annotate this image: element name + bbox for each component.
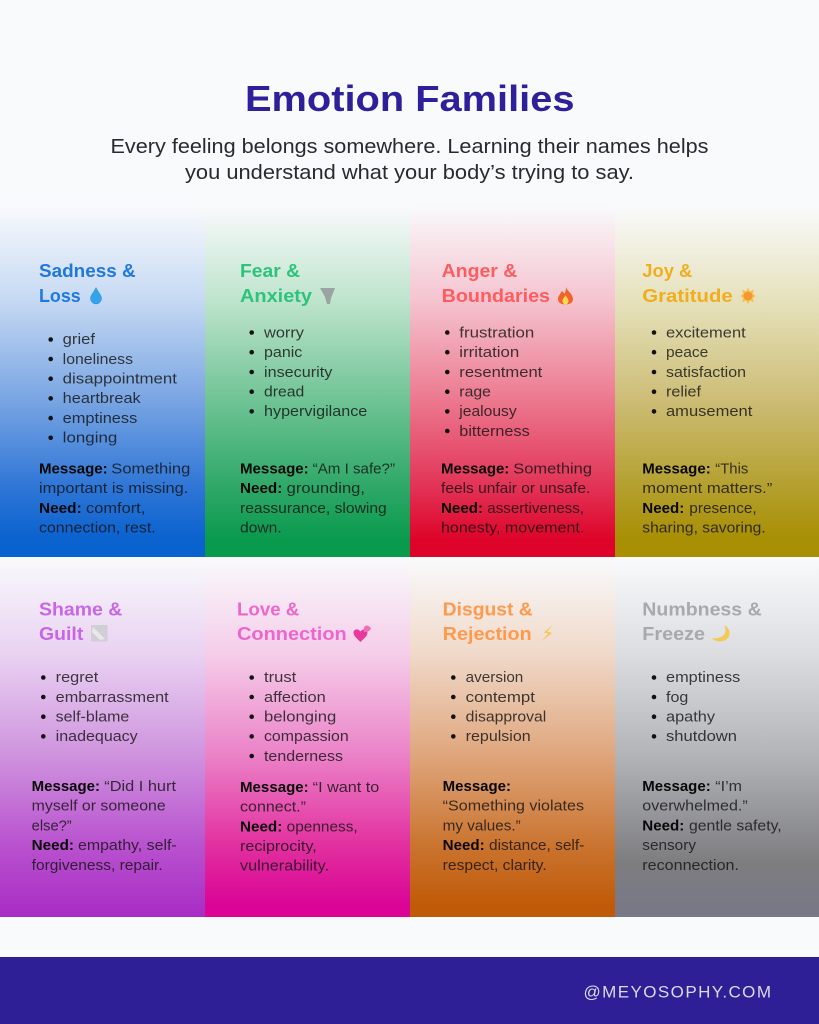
feelings list: heartbreak	[63, 391, 142, 407]
message and need: “This	[715, 462, 748, 478]
footer bar	[0, 957, 819, 1024]
feelings list: longing	[63, 430, 117, 446]
feelings list: insecurity	[264, 365, 333, 381]
icon: flame	[558, 287, 573, 304]
message and need: Message:	[32, 779, 100, 795]
message and need: “I’m	[715, 779, 742, 795]
message and need	[441, 462, 592, 536]
heading: joy and gratitude: Joy &	[642, 260, 692, 281]
message and need	[642, 779, 782, 874]
feelings list: disapproval	[466, 710, 546, 726]
subtitle: you understand what your body’s trying to say.	[185, 162, 634, 184]
panel background: grey gradient	[615, 557, 819, 917]
message and need: respect, clarity.	[443, 858, 547, 874]
panel background: magenta gradient	[205, 557, 410, 917]
heading: love and connection	[237, 598, 347, 644]
panel background: blue gradient	[0, 205, 205, 557]
feelings list: inadequacy	[56, 729, 139, 745]
feelings list: fog	[666, 690, 688, 706]
feelings list: rage	[459, 384, 491, 400]
feelings list	[652, 326, 752, 420]
message and need: Need:	[32, 838, 74, 854]
message and need: Message:	[443, 779, 511, 795]
feelings list: disappointment	[63, 372, 177, 388]
feelings list: bitterness	[459, 424, 530, 440]
message and need: important is missing.	[39, 481, 188, 497]
panel: sadness and loss	[0, 205, 205, 557]
message and need: reciprocity,	[240, 839, 317, 855]
feelings list: emptiness	[666, 670, 740, 686]
message and need: reconnection.	[642, 858, 739, 874]
feelings list: loneliness	[63, 352, 133, 368]
feelings list	[445, 326, 542, 440]
icon: tornado	[320, 288, 335, 304]
heading: numbness and freeze: Numbness &	[642, 598, 762, 620]
message and need	[642, 462, 772, 536]
panel background: green gradient	[205, 205, 410, 557]
subtitle: Every feeling belongs somewhere. Learning their names helps	[110, 136, 708, 158]
feelings list: excitement	[666, 326, 746, 342]
feelings list: irritation	[459, 345, 519, 361]
icon: lightning bolt	[541, 624, 553, 642]
message and need	[240, 780, 379, 875]
heading: anger and boundaries	[442, 260, 550, 306]
message and need: vulnerability.	[240, 859, 329, 875]
feelings list: apathy	[666, 710, 716, 726]
message and need	[240, 462, 395, 536]
feelings list: amusement	[666, 404, 752, 420]
message and need: distance, self-	[489, 838, 584, 854]
message and need: “Did I hurt	[104, 779, 176, 795]
message and need: Need:	[642, 501, 684, 517]
heading: love and connection: Connection	[237, 623, 347, 644]
message and need: down.	[240, 520, 282, 536]
message and need: Message:	[240, 780, 309, 796]
panel background: red gradient	[410, 205, 615, 557]
message and need: Message:	[39, 462, 108, 478]
panel background: orange gradient	[410, 557, 615, 917]
heading: sadness and loss	[39, 260, 136, 306]
feelings list: compassion	[264, 729, 349, 745]
message and need: Need:	[240, 819, 282, 835]
heading: anger and boundaries: Boundaries	[442, 285, 550, 306]
feelings list: contempt	[466, 690, 535, 706]
heading: fear and anxiety: Fear &	[240, 260, 300, 281]
message and need: sensory	[642, 838, 697, 854]
feelings list: aversion	[466, 670, 523, 686]
panel background: gold gradient	[615, 205, 819, 557]
heading: disgust and rejection: Disgust &	[443, 598, 533, 620]
message and need: “Something violates	[443, 799, 584, 815]
feelings list: belonging	[264, 710, 336, 726]
footer website text: @MEYOSOPHY.COM	[584, 982, 771, 1002]
panel background: purple gradient	[0, 557, 205, 917]
feelings list: jealousy	[458, 404, 518, 420]
icon: sun	[740, 288, 756, 304]
heading: numbness and freeze	[642, 598, 762, 644]
message and need	[443, 779, 584, 874]
heading: fear and anxiety	[240, 260, 313, 306]
feelings list	[41, 670, 169, 745]
feelings list: peace	[666, 345, 708, 361]
icon: water drop	[90, 288, 102, 304]
feelings list: tenderness	[264, 749, 343, 765]
message and need: grounding,	[287, 481, 365, 497]
icon: crescent moon	[712, 625, 730, 641]
feelings list: regret	[56, 670, 98, 686]
feelings list: emptiness	[63, 411, 137, 427]
message and need: Need:	[441, 501, 483, 517]
heading: sadness and loss: Sadness &	[39, 260, 136, 281]
heading: anger and boundaries: Anger &	[442, 260, 517, 281]
feelings list: trust	[264, 670, 296, 686]
message and need: feels unfair or unsafe.	[441, 481, 590, 497]
feelings list: hypervigilance	[264, 404, 367, 420]
feelings list: satisfaction	[666, 365, 746, 381]
feelings list: repulsion	[466, 729, 531, 745]
message and need: moment matters.”	[642, 481, 772, 497]
feelings list: relief	[666, 384, 702, 400]
feelings list: shutdown	[666, 729, 737, 745]
heading: sadness and loss: Loss	[39, 285, 81, 306]
message and need: Message:	[240, 462, 309, 478]
message and need: openness,	[287, 819, 358, 835]
feelings list: worry	[263, 326, 305, 342]
message and need: my values.”	[443, 818, 521, 834]
message and need: connect.”	[240, 800, 306, 816]
feelings list	[48, 332, 177, 446]
subtitle	[110, 136, 708, 184]
feelings list: frustration	[459, 326, 534, 342]
feelings list: dread	[264, 384, 304, 400]
heading: disgust and rejection	[443, 598, 533, 644]
message and need: comfort,	[86, 501, 145, 517]
message and need	[39, 462, 190, 536]
feelings list: self-blame	[56, 710, 129, 726]
message and need: Need:	[39, 501, 82, 517]
heading: shame and guilt: Shame &	[39, 598, 122, 620]
heading: fear and anxiety: Anxiety	[240, 285, 313, 306]
message and need: Message:	[642, 779, 711, 795]
panel: anger and boundaries	[410, 205, 615, 557]
icon: blurred grey square	[91, 625, 108, 642]
feelings list: embarrassment	[56, 690, 169, 706]
icon: hearts	[354, 626, 371, 642]
message and need: forgiveness, repair.	[32, 858, 163, 874]
message and need: Need:	[443, 838, 485, 854]
message and need: Message:	[441, 462, 509, 478]
feelings list	[249, 670, 349, 765]
message and need: assertiveness,	[487, 501, 584, 517]
title: Emotion Families	[245, 78, 574, 119]
message and need: “I want to	[313, 780, 379, 796]
panel: shame and guilt	[0, 557, 205, 917]
heading: shame and guilt	[39, 598, 122, 644]
message and need: Need:	[240, 481, 282, 497]
message and need: Something	[513, 462, 592, 478]
message and need	[32, 779, 177, 874]
panel: love and connection	[205, 557, 410, 917]
feelings list	[451, 670, 546, 745]
feelings list: panic	[264, 345, 302, 361]
message and need: reassurance, slowing	[240, 501, 387, 517]
panel: joy and gratitude	[615, 205, 819, 557]
feelings list: resentment	[459, 365, 542, 381]
heading: shame and guilt: Guilt	[39, 623, 83, 644]
feelings list: affection	[264, 690, 326, 706]
message and need: Something	[111, 462, 190, 478]
message and need: myself or someone	[32, 799, 166, 815]
panel: numbness and freeze	[615, 557, 819, 917]
message and need: overwhelmed.”	[642, 799, 748, 815]
heading: numbness and freeze: Freeze	[642, 623, 705, 644]
message and need: connection, rest.	[39, 520, 156, 536]
message and need: else?”	[32, 818, 72, 834]
message and need: honesty, movement.	[441, 520, 584, 536]
message and need: presence,	[689, 501, 757, 517]
heading: love and connection: Love &	[237, 598, 299, 620]
feelings list: grief	[63, 332, 96, 348]
message and need: Message:	[642, 462, 711, 478]
heading: joy and gratitude: Gratitude	[642, 285, 733, 306]
message and need: Need:	[642, 818, 684, 834]
message and need: “Am I safe?”	[313, 462, 395, 478]
panel: fear and anxiety	[205, 205, 410, 557]
heading: joy and gratitude	[642, 260, 733, 306]
heading: disgust and rejection: Rejection	[443, 623, 532, 644]
message and need: empathy, self-	[78, 838, 177, 854]
panel: disgust and rejection	[410, 557, 615, 917]
feelings list	[652, 670, 740, 745]
message and need: gentle safety,	[689, 818, 782, 834]
message and need: sharing, savoring.	[642, 520, 766, 536]
feelings list	[249, 326, 367, 420]
